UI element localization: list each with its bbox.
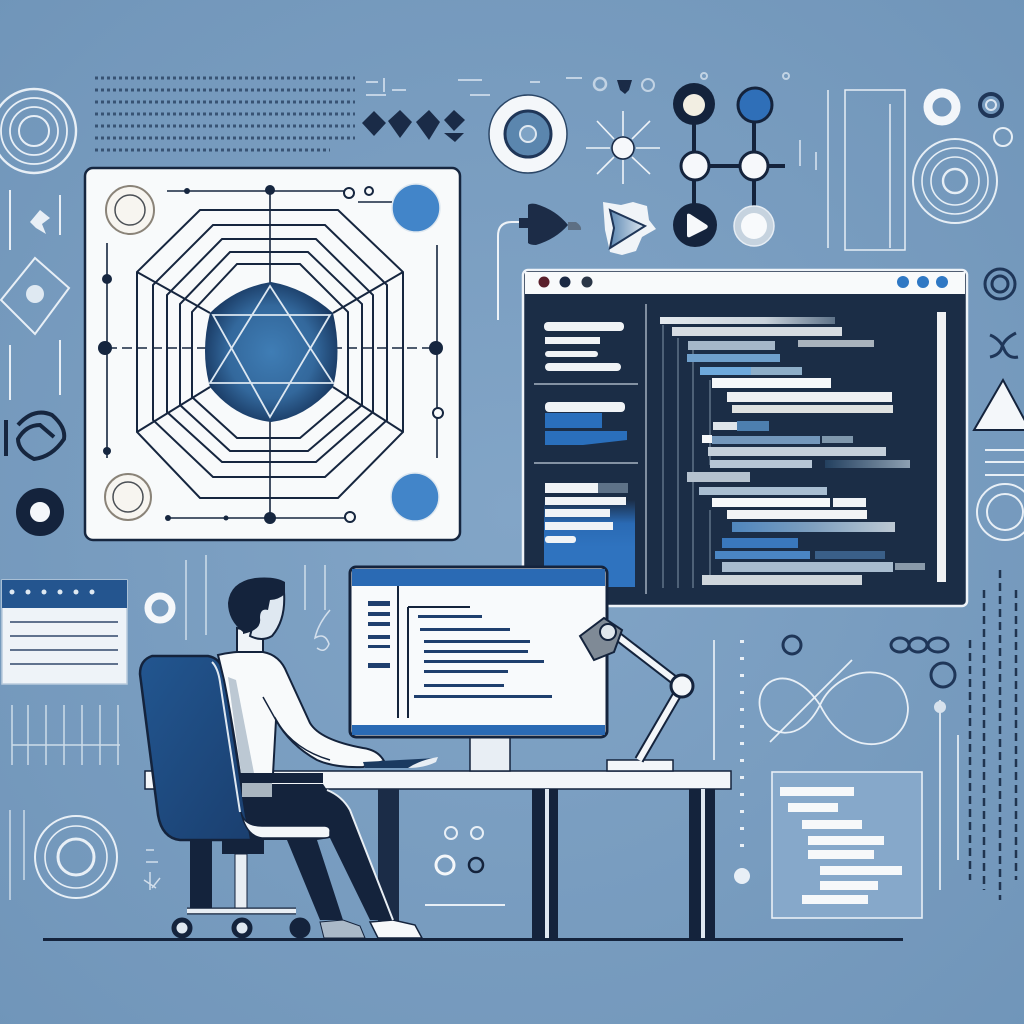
monitor lines (368, 601, 552, 698)
sidebar lines (544, 547, 635, 587)
chair seat (241, 812, 330, 838)
glasses glyph (783, 636, 955, 687)
panel: small left window (2, 580, 127, 684)
left side icons (1, 190, 69, 400)
desk lamp (580, 618, 693, 771)
panel: code editor window (523, 270, 967, 606)
legs (240, 784, 393, 920)
axis nodes (98, 185, 443, 524)
top right rectangle lines (828, 90, 905, 250)
neck (237, 628, 263, 652)
torso and arm (218, 651, 384, 774)
shoes (320, 920, 365, 938)
top right rings (913, 93, 1012, 223)
icon: right rings (977, 450, 1024, 540)
code lines (660, 317, 925, 585)
small circles under desk (425, 827, 505, 905)
axis small rings (344, 187, 443, 522)
central gem (205, 282, 338, 422)
left scribble icon (6, 413, 64, 459)
icon: plug (498, 204, 581, 320)
desk (145, 771, 731, 939)
axes (107, 191, 437, 518)
icon: warning triangle (974, 380, 1024, 430)
monitor (350, 567, 607, 771)
corner circles (392, 184, 440, 232)
diamonds row (362, 110, 465, 142)
icon: ring target (489, 95, 567, 173)
top dotted texture (95, 78, 355, 150)
small ring (148, 596, 172, 620)
left donut (23, 495, 57, 529)
chair back (140, 656, 308, 936)
right side icons (985, 269, 1018, 357)
face (250, 590, 284, 639)
shirt shading (228, 677, 254, 773)
waist (241, 773, 323, 783)
sidebar highlights (545, 413, 627, 445)
icon: play tag (603, 202, 656, 255)
person at desk (140, 578, 438, 938)
right dashed columns (970, 570, 1016, 900)
hair (228, 578, 285, 634)
top left rings (0, 89, 76, 173)
under-desk glyphs (144, 610, 330, 890)
scrollbar (937, 312, 946, 582)
infinity loops (760, 660, 908, 744)
vertical sketch marks (714, 640, 958, 890)
icon: sun burst (586, 111, 660, 184)
node graph (673, 83, 785, 247)
keyboard and mouse (363, 758, 437, 768)
floor line (43, 938, 903, 941)
small top glyphs (366, 73, 816, 170)
bottom left rings (35, 816, 117, 898)
dotted column (740, 640, 744, 860)
octagon web (137, 210, 403, 498)
panel: bottom right code card (772, 772, 922, 918)
panel: octagon diagram card (85, 168, 460, 540)
bottom left sketch lines (10, 555, 325, 900)
dividers (534, 304, 646, 594)
icon: shield dot (617, 80, 632, 94)
